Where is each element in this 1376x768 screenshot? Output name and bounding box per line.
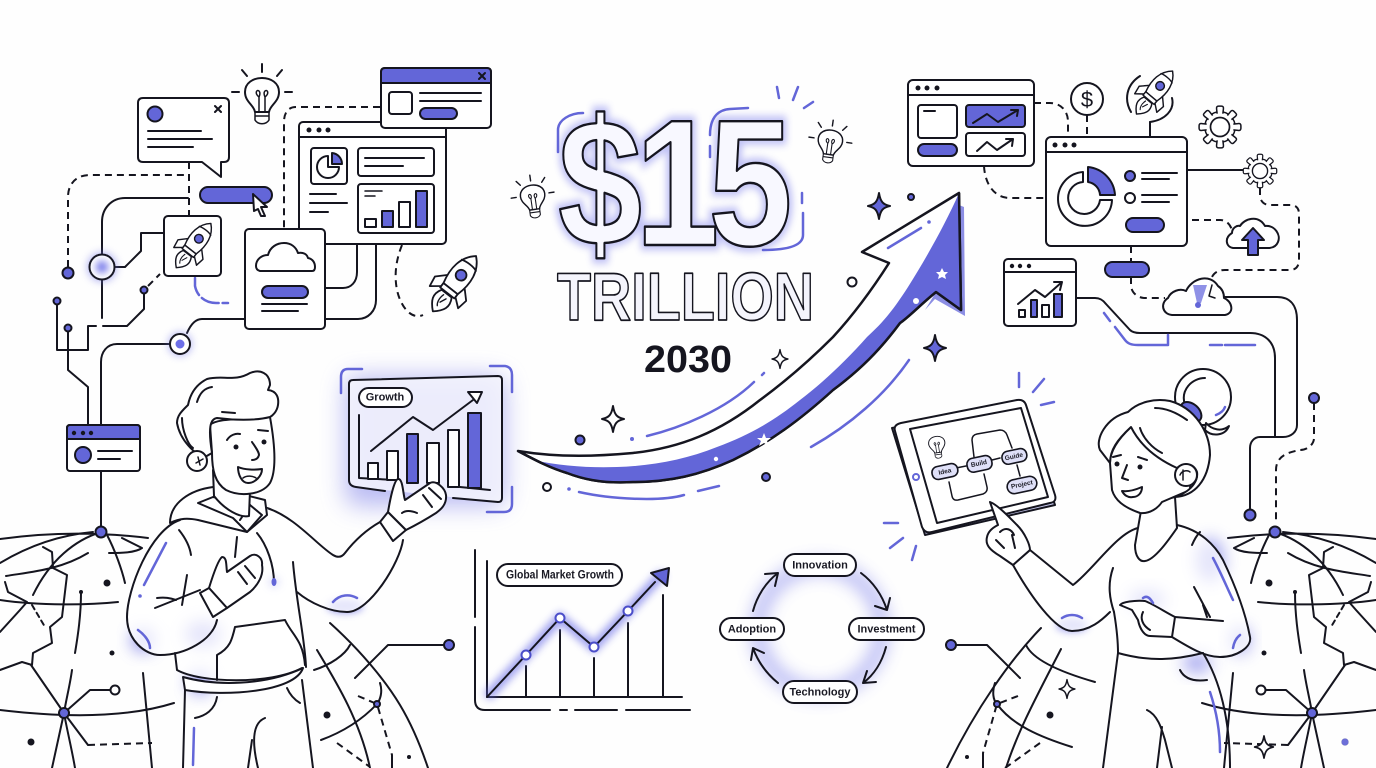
dashboard window [299,122,446,244]
Guide node [1001,447,1028,465]
window with trend charts [908,80,1034,166]
arrow motion dashes [567,360,909,499]
face details [1114,462,1120,466]
right circuit network [984,103,1319,523]
torso [1013,525,1250,659]
face [210,417,275,494]
soft purple highlights on man [131,576,363,694]
left circuit network [54,107,423,532]
Adoption [720,618,784,640]
Investment [849,618,924,640]
hair [177,372,278,457]
neck [213,470,250,516]
inner body lines [1110,532,1210,617]
purple accents on woman [1062,558,1240,752]
small chart window [1004,259,1076,326]
Project node: Project [1010,479,1034,491]
donut chart [1058,167,1115,226]
head [1110,420,1192,513]
Growth label: Growth [366,392,405,404]
purple accents on man [138,543,357,765]
global market growth chart [475,550,690,710]
woman presenter [987,369,1250,768]
tablet with flow diagram [884,373,1055,560]
small window on left wire [67,425,140,471]
soft purple highlights on woman [1056,538,1250,673]
Idea node: Idea [938,467,952,477]
purple pill connector [1105,262,1149,277]
sparkle and dot near right globe [1255,736,1348,758]
Innovation: Innovation [792,560,848,572]
title accents [558,87,813,250]
cloud with funnel [1163,278,1231,315]
hood [170,487,267,532]
icon: rocket left [417,244,492,324]
Technology: Technology [790,686,851,698]
growth arrow [518,193,965,482]
legs [1103,653,1230,768]
title: $15: $15 [558,84,792,284]
main analytics window [1046,137,1187,246]
dollar coin icon: $ [1081,87,1093,112]
man presenter [127,372,446,768]
Innovation [784,554,856,576]
sparkles and dots around arrow [543,193,946,491]
pointing arm hand [987,502,1030,565]
chart label: Global Market Growth [506,570,614,582]
icon: large gear [1199,106,1241,148]
woman globe left part [946,628,1095,768]
neck and collar [1135,497,1177,561]
Idea node [931,462,959,481]
right-of-man globe lines [314,623,454,768]
title: $15: $15 [558,84,792,284]
chart label [497,564,622,586]
icon: small gear [1243,154,1277,188]
Investment: Investment [857,624,916,636]
Build node [966,454,993,473]
title: TRILLION: TRILLION [557,259,814,335]
bun [1175,369,1231,425]
pointing left hand [1120,601,1175,637]
Guide node: Guide [1004,452,1024,462]
hand open [388,479,446,530]
right globe [1202,526,1376,768]
Adoption: Adoption [728,624,776,636]
right arm raised [267,508,403,612]
icon: rocket right [1124,61,1185,124]
icon: cloud upload [1227,219,1279,255]
left globe [0,526,174,768]
eyes and expression [234,444,238,450]
ear [187,451,207,471]
Build node: Build [970,459,988,469]
dollar coin icon [1071,83,1103,115]
legs [183,680,313,768]
popup window [381,68,491,128]
cloud card [245,229,325,329]
ear [1175,464,1197,486]
torso [127,490,303,680]
year 2030: 2030 [644,339,732,381]
Project node [1006,475,1038,495]
icon: bulb right of title [806,117,855,166]
Growth label [359,388,412,407]
hair [1099,400,1210,497]
speech bubble card [138,98,229,177]
cycle diagram [720,554,924,703]
icon: light bulb top left [232,64,292,124]
chest hand and sleeve [209,555,262,608]
growth chart board [341,366,512,512]
rocket tile [164,214,223,277]
Technology [783,681,857,703]
purple button with cursor [200,187,272,216]
icon: bulb left of title [508,172,557,221]
